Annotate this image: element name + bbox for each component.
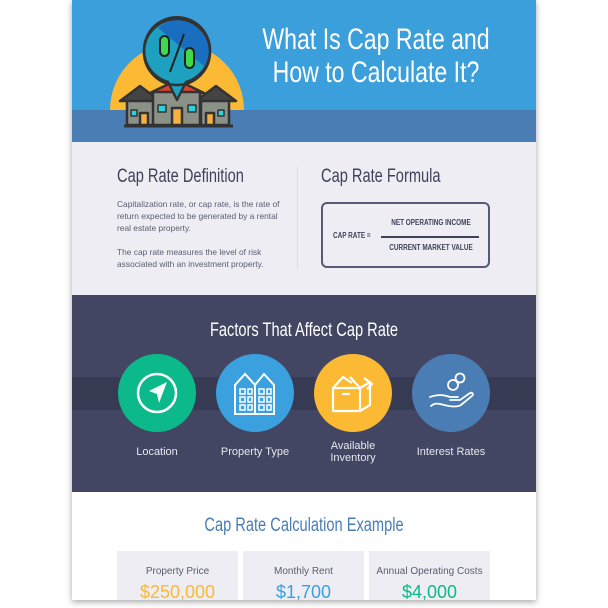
title <box>262 23 490 89</box>
text block: definition <box>117 199 280 269</box>
icon: property type <box>216 354 294 432</box>
title: How to Calculate It? <box>273 56 479 89</box>
formula box: CURRENT MARKET VALUE <box>389 243 473 252</box>
card: property price: Property Price <box>146 566 209 577</box>
card: monthly rent: Monthly Rent <box>274 566 333 577</box>
label: location: Location <box>136 446 178 458</box>
text block: definition: Capitalization rate, or cap rate, is the rate of return expected to be generated by a rental real estate property. <box>117 199 279 233</box>
formula box: NET OPERATING INCOME <box>391 218 471 227</box>
page card <box>72 0 536 600</box>
text block: definition: The cap rate measures the level of risk associated with an investment property. <box>117 247 263 269</box>
heading: definition: Cap Rate Definition <box>117 166 244 187</box>
label: available inventory: Inventory <box>330 452 376 464</box>
icon: available inventory <box>314 354 392 432</box>
header section <box>72 0 536 142</box>
panel: definition and formula <box>72 142 536 295</box>
heading: factors: Factors That Affect Cap Rate <box>210 320 398 341</box>
label: interest rates: Interest Rates <box>417 446 485 458</box>
formula box: CAP RATE = <box>333 231 371 240</box>
heading: calculation example: Cap Rate Calculation Example <box>204 515 404 536</box>
card: property price <box>117 551 238 600</box>
icon: interest rates <box>412 354 490 432</box>
card: monthly rent <box>243 551 364 600</box>
panel: factors <box>72 295 536 492</box>
card: annual operating costs: Annual Operating Costs <box>376 566 483 577</box>
card: annual operating costs <box>369 551 490 600</box>
ground strip <box>72 110 536 142</box>
formula box <box>321 202 490 268</box>
icon: houses with percent pin <box>110 16 244 128</box>
label: available inventory: Available <box>331 440 375 452</box>
icon: location <box>118 354 196 432</box>
title: What Is Cap Rate and <box>262 23 490 56</box>
label: property type: Property Type <box>221 446 289 458</box>
heading: formula: Cap Rate Formula <box>321 166 441 187</box>
label: available inventory <box>330 440 376 464</box>
